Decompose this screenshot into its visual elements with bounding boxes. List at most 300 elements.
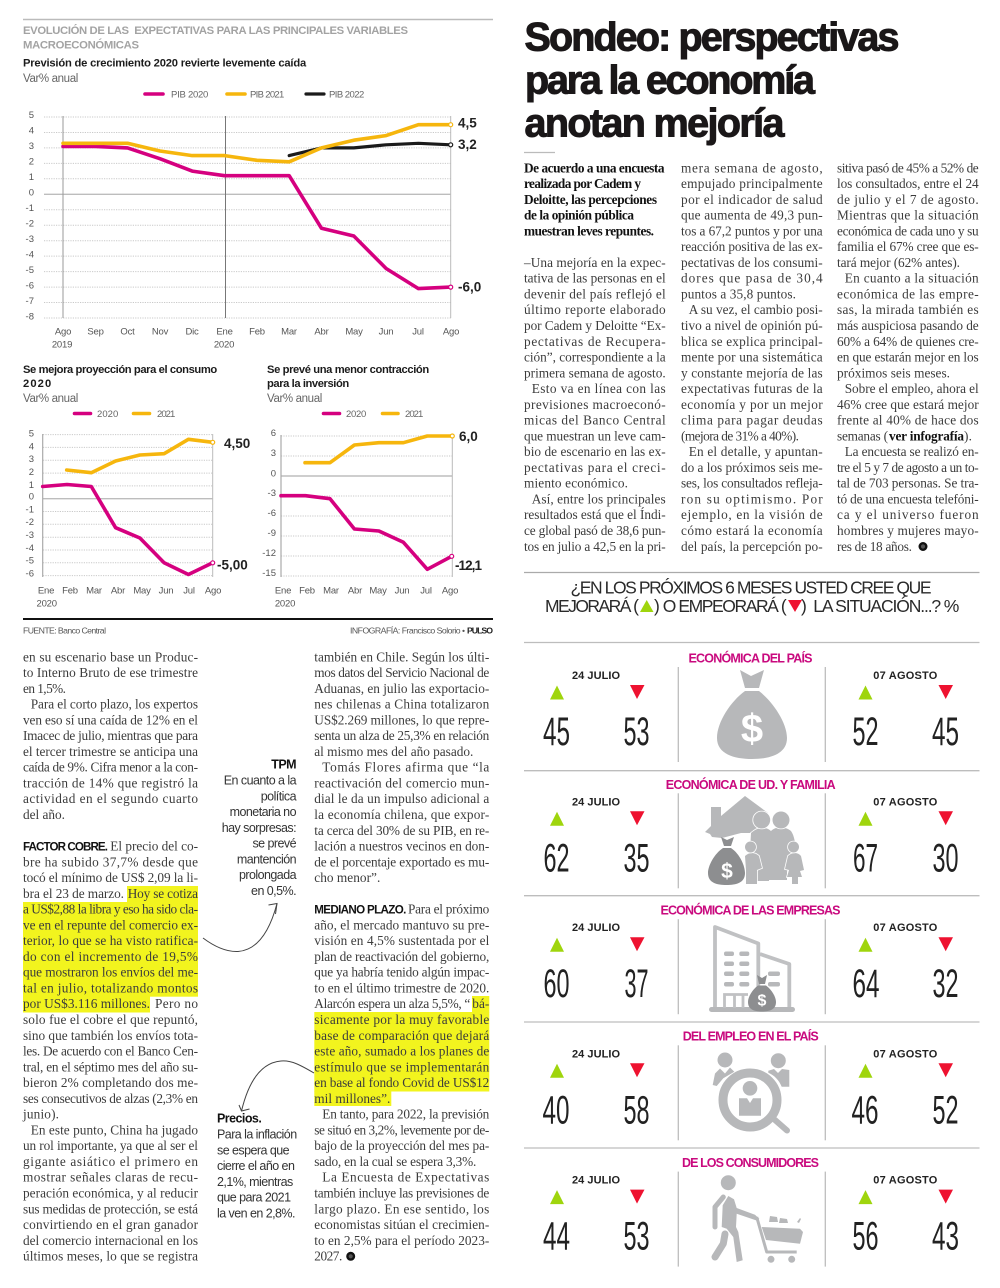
y axis labels: GDP: 0	[29, 188, 34, 198]
x axis labels: GDP: Sep	[87, 326, 104, 338]
x axis labels: GDP: 2019	[52, 340, 72, 350]
y axis labels: investment	[262, 428, 276, 579]
article lead: realizada por Cadem y	[524, 176, 641, 191]
article column 2: del país, la percepción po-	[681, 539, 823, 554]
value labels: investment	[455, 429, 482, 573]
article column: left: bre ha subido 37,7% desde que	[23, 854, 198, 869]
line: consumption 2021	[67, 439, 213, 473]
article column: left: últimos meses, lo que se registra	[23, 1249, 198, 1264]
article column: right of lower section: to en el último trimestre de 2020.	[314, 980, 489, 996]
infographic credit: PULSO	[467, 626, 493, 636]
y axis labels: GDP: -3	[26, 234, 34, 245]
article column 3: La encuesta se realizó en-	[845, 444, 979, 459]
legend: investment series: 2020	[346, 409, 366, 420]
article column 3: familia el 67% cree que es-	[837, 239, 979, 254]
survey question heading: )	[801, 596, 807, 616]
heading: macro expectations: MACROECONÓMICAS	[23, 38, 139, 52]
article column: left: Hoy se cotiza	[128, 886, 198, 901]
heading: macro expectations: EVOLUCIÓN DE LAS EXPECTATIVAS PARA LAS PRINCIPALES VARIABLES	[23, 24, 408, 37]
x axis labels: GDP: Jun	[379, 326, 393, 338]
article column 2: empujado principalmente	[681, 176, 823, 191]
article column: right of lower section: Tomás Flores afirma que “la	[322, 760, 489, 775]
article column 3: Mientras que la situación	[837, 208, 979, 223]
chart heading: consumption: Var% anual	[23, 393, 78, 405]
title	[524, 16, 900, 146]
value labels: GDP: -6,0	[458, 280, 481, 294]
row: economy of companies: ECONÓMICA DE LAS EMPRESAS	[660, 902, 840, 918]
chart heading: GDP: Previsión de crecimiento 2020 revierte levemente caída	[23, 58, 307, 70]
article column: right of lower section: año, el mercado mantuvo su pre-	[314, 917, 489, 932]
y axis labels: GDP: -1	[26, 203, 34, 214]
heading: macro expectations	[23, 24, 408, 52]
article column: left: Para el corto plazo, los expertos	[31, 697, 198, 712]
article column 2: ses, los consultados refleja-	[681, 476, 823, 491]
article column: left: sus medidas de protección, se está	[23, 1201, 198, 1216]
article column 1: resultados está que el Índi-	[524, 507, 666, 522]
row: consumers: 56	[852, 1215, 878, 1259]
x axis labels: GDP: Feb	[249, 326, 265, 338]
title: Sondeo: perspectivas	[524, 16, 900, 60]
side note: TPM: se prevé	[252, 836, 297, 850]
x axis labels: investment: Ene	[275, 586, 291, 596]
y axis labels: GDP: -8	[26, 312, 34, 322]
icon: family with house and bag: $	[721, 860, 733, 883]
y axis labels: GDP: -5	[26, 265, 34, 276]
article column 1: por Cadem y Deloitte “Ex-	[524, 318, 666, 333]
article column 1: tos en julio a 42,5 en la pri-	[524, 539, 666, 554]
article column 3: en que estarán mejor en los	[837, 350, 979, 364]
y axis labels: GDP: 3	[29, 141, 34, 152]
x axis labels: consumption: Abr	[111, 586, 125, 596]
arrow: quote highlight to prices note	[239, 1061, 314, 1111]
article column: left: del comercio internacional en los	[23, 1233, 198, 1248]
row: economy of companies: 37	[624, 962, 648, 1006]
article column 2: blica se explica principal-	[681, 334, 823, 349]
icon: office building with bag: $	[758, 992, 767, 1010]
article column: right of lower section: largo plazo. En ese sentido, los	[314, 1201, 489, 1216]
y axis labels: consumption	[26, 428, 34, 580]
title: anotan mejoría	[524, 102, 786, 146]
chart heading: consumption	[23, 364, 217, 405]
row: consumers: DE LOS CONSUMIDORES	[682, 1156, 819, 1170]
article column 2: pectativas de los consumi-	[681, 255, 823, 270]
side note: TPM: en 0,5%.	[251, 884, 296, 898]
legend: consumption series: 2020	[97, 409, 118, 420]
article column: right of lower section: 2027.	[314, 1249, 342, 1264]
article column 3: res de 18 años.	[837, 539, 912, 554]
article column 2	[681, 160, 823, 554]
article column 1: último reporte elaborado	[524, 302, 666, 317]
y axis labels: GDP	[26, 110, 34, 322]
row: economy of the country: 53	[624, 710, 650, 754]
x axis labels: GDP: Abr	[314, 326, 329, 338]
article column 3: 46% cree que estará mejor	[837, 397, 979, 412]
article column 3: tará mejor (62% antes).	[837, 255, 960, 270]
legend: GDP series: PIB 2020	[171, 90, 208, 100]
side note: TPM: prolongada	[239, 868, 297, 882]
row: consumers: 24 JULIO	[572, 1175, 620, 1187]
article column: right of lower section: senta un alza de 25,3% en relación	[314, 728, 490, 743]
y axis labels: consumption: -6	[26, 568, 34, 580]
y axis labels: consumption: -3	[26, 530, 34, 541]
x axis labels: consumption: 2020	[37, 598, 57, 610]
y axis labels: investment: -3	[268, 488, 276, 499]
article column: left: sino que también los envíos tota-	[23, 1028, 198, 1043]
line: PIB 2020	[63, 146, 451, 289]
value labels: GDP: 4,5	[458, 116, 477, 130]
y axis labels: consumption: -1	[26, 504, 34, 515]
article column 3: En cuanto a la situación	[845, 271, 979, 286]
x axis labels: GDP: Oct	[120, 326, 135, 338]
article column: left: en su escenario base un Produc-	[23, 649, 198, 664]
side note: prices: Precios.	[217, 1112, 261, 1126]
article column 1: Así, entre los principales	[532, 492, 666, 506]
article column 3: de julio y el 7 de agosto.	[837, 192, 979, 207]
chart: consumption forecast	[23, 364, 250, 610]
article column 2: tivo a nivel de opinión pú-	[681, 318, 823, 333]
x axis labels: GDP: May	[345, 326, 363, 338]
x axis labels: consumption	[37, 586, 221, 610]
row: economy of you and family: 30	[932, 836, 958, 880]
article column: right of lower section: dial le da un impulso adicional a	[314, 791, 489, 806]
y axis labels: investment: -12	[262, 548, 276, 559]
article column 1: Esto va en línea con las	[532, 381, 666, 396]
value labels: consumption	[217, 436, 250, 572]
x axis labels: investment	[275, 586, 458, 610]
article column: left: caída de 9%. Cifra menor a la con-	[23, 760, 198, 775]
x axis labels: investment: Jun	[395, 586, 409, 596]
article column: left: El precio del co-	[110, 838, 198, 854]
article column 1: que muestran un leve cam-	[524, 428, 666, 443]
row: consumers	[543, 1156, 959, 1267]
article column 2: dores que pasa de 30,4	[681, 271, 823, 286]
icon: money bag: $	[741, 707, 763, 751]
side note: TPM: En cuanto a la	[224, 774, 297, 788]
chart heading: investment: Se prevé una menor contracción	[267, 364, 429, 376]
line: investment 2020	[281, 496, 452, 569]
x axis labels: GDP: Nov	[152, 326, 169, 338]
row: economy of you and family: 07 AGOSTO	[873, 796, 938, 808]
survey question heading: )	[654, 596, 660, 616]
article column: left: bra el 23 de marzo.	[23, 886, 124, 901]
chart heading: consumption: 2020	[23, 378, 51, 390]
x axis labels: GDP: Ene	[216, 326, 233, 338]
article column 2: A su vez, el cambio posi-	[689, 302, 823, 317]
row: economy of companies: 07 AGOSTO	[873, 922, 938, 934]
article column 1: primera semana de agosto.	[524, 365, 666, 380]
article column: right of lower section: lación a nuestros vecinos en don-	[314, 838, 489, 854]
x axis labels: investment: Jul	[420, 586, 432, 596]
article column 2: clima para pagar deudas	[681, 413, 823, 428]
article column: right of lower section: al mismo mes del año pasado.	[314, 744, 473, 759]
row: economy of you and family: ECONÓMICA DE UD. Y FAMILIA	[666, 777, 836, 792]
row: economy of the country: ECONÓMICA DEL PAÍS	[688, 650, 812, 666]
article column 3: ).	[964, 428, 972, 443]
article column: right of lower section: reactivación del comercio mun-	[314, 776, 489, 790]
survey question heading: O EMPEORARÁ (	[663, 596, 787, 616]
article column: left: peración económica, y al reducir	[23, 1186, 199, 1200]
article column: right of lower section: también en Chile. Según los últi-	[314, 649, 489, 664]
article column 1: tativa de las personas en el	[524, 271, 666, 286]
article column 2: ejemplo, en la visión de	[681, 507, 823, 522]
article column 3: más auspiciosa pasando de	[837, 318, 979, 333]
article column: right of lower section	[314, 649, 490, 1264]
side note: TPM: TPM	[271, 758, 296, 772]
line: consumption 2020	[43, 484, 213, 574]
article column: right of lower section: Para el próximo	[408, 902, 490, 917]
y axis labels: consumption: 4	[29, 441, 34, 452]
article column: right of lower section: cho menor”.	[314, 870, 380, 885]
row: economy of the country: 45	[932, 710, 959, 754]
y axis labels: GDP: 4	[29, 126, 34, 136]
x axis labels: investment: Ago	[442, 586, 458, 596]
row: economy of you and family: 67	[853, 836, 878, 880]
article column 2: economía y por un mejor	[681, 397, 823, 412]
article column 3: sas, la mirada también es	[837, 302, 979, 317]
x axis labels: GDP: Jul	[412, 326, 424, 338]
y axis labels: GDP: -7	[26, 296, 34, 307]
legend: investment series	[324, 409, 423, 420]
article column: left: Imacec de julio, mientras que para	[23, 728, 198, 743]
side note: TPM	[222, 758, 297, 898]
icon: family with house and bag	[705, 796, 804, 885]
article column: right of lower section: en base al fondo Covid de US$12	[314, 1075, 489, 1090]
article column: right of lower section: la economía chilena, que expor-	[314, 807, 489, 822]
article lead	[524, 160, 665, 238]
y axis labels: investment: 0	[271, 468, 276, 480]
survey question heading	[545, 576, 959, 616]
y axis labels: consumption: 5	[29, 428, 34, 440]
article column 3: los consultados, entre el 24	[837, 176, 979, 191]
chart heading: investment: para la inversión	[267, 378, 349, 390]
row: economy of companies: 32	[932, 962, 958, 1006]
infographic credit: INFOGRAFÍA: Francisco Solorio •	[350, 626, 465, 636]
article column: left: del año.	[23, 807, 65, 822]
row: economy of the country: 07 AGOSTO	[873, 670, 938, 682]
y axis labels: consumption: -2	[26, 517, 34, 528]
article column: left: FACTOR COBRE.	[23, 840, 108, 854]
article column 1: pectativas de Recupera-	[524, 334, 666, 349]
article column: right of lower section: que ya habría tenido algún impac-	[314, 965, 489, 980]
article column: right of lower section: estímulo que se implementarán	[314, 1059, 490, 1074]
survey question heading: LA SITUACIÓN...? %	[813, 595, 959, 616]
x axis labels: consumption: Jul	[183, 586, 195, 596]
y axis labels: consumption: 1	[29, 480, 34, 491]
article column 3: próximos seis meses.	[837, 365, 950, 380]
legend: GDP series: PIB 2021	[250, 90, 284, 100]
article column: left: en 1,5%.	[23, 681, 66, 696]
article column 1: previsiones macroeconó-	[524, 397, 666, 412]
arrow: copper highlight to TPM note	[203, 904, 277, 952]
article column 1: micas del Banco Central	[524, 413, 666, 428]
article column 2: cómo estará la economía	[681, 523, 823, 538]
article column 2: En el detalle, y apuntan-	[689, 444, 823, 459]
article column 2: tos a 67,2 puntos y por una	[681, 223, 823, 238]
article column: left: el tercer trimestre se anticipa una	[23, 744, 198, 759]
article column: left: junio).	[22, 1107, 59, 1122]
row: economy of companies: 60	[544, 962, 570, 1006]
side note: TPM: monetaria no	[230, 805, 297, 819]
article column: right of lower section: US$2.269 millones, lo que repre-	[314, 712, 489, 727]
chart heading: investment: Var% anual	[267, 393, 322, 405]
row: economy of companies	[544, 902, 958, 1014]
x axis labels: consumption: Ene	[38, 586, 54, 596]
icon: magnifier over people	[713, 1052, 789, 1130]
row: economy of you and family	[544, 777, 958, 888]
line: PIB 2022	[289, 143, 451, 156]
article column 3: económica de las empre-	[837, 286, 979, 302]
article column 3: Sobre el empleo, ahora el	[845, 381, 979, 396]
article column: left: tocó el mínimo de US$ 2,09 la li-	[23, 870, 198, 885]
value labels: consumption: 4,50	[224, 436, 250, 451]
side note: prices: 2,1%, mientras	[217, 1175, 293, 1189]
article column: left: tracción de 14% que registró la	[23, 776, 198, 790]
value labels: GDP	[458, 116, 481, 294]
y axis labels: GDP: 1	[29, 172, 34, 183]
article column: right of lower section: bá-	[472, 996, 489, 1011]
row: economy of the country: 24 JULIO	[572, 670, 620, 682]
x axis labels: investment: Feb	[299, 586, 315, 596]
article column 1: –Una mejoría en la expec-	[523, 255, 666, 270]
side note: prices	[217, 1112, 297, 1220]
article column: right of lower section: Alarcón espera un alza 5,5%, “	[314, 996, 470, 1011]
value labels: investment: 6,0	[459, 429, 478, 444]
survey question heading: ¿EN LOS PRÓXIMOS 6 MESES USTED CREE QUE	[570, 576, 932, 598]
y axis labels: GDP: -2	[26, 218, 34, 230]
article column: right of lower section: MEDIANO PLAZO.	[314, 904, 406, 917]
article column: right of lower section: bajo de la proyección del mes pa-	[314, 1138, 489, 1153]
article column: right of lower section: mil millones”.	[314, 1091, 390, 1106]
row: economy of you and family: 24 JULIO	[572, 796, 620, 808]
article column 2: que aumenta de 49,3 pun-	[681, 208, 823, 223]
x axis labels: investment: May	[369, 586, 387, 596]
survey question heading: MEJORARÁ (	[545, 596, 639, 616]
row: consumers: 44	[543, 1215, 570, 1259]
y axis labels: GDP: 2	[29, 156, 34, 168]
article column: right of lower section: también incluye las previsiones de	[314, 1186, 489, 1200]
article column: left: que mostraron los envíos del me-	[23, 965, 198, 980]
panel: macroeconomic expectations charts	[23, 20, 493, 636]
legend: GDP series	[145, 90, 364, 100]
chart heading: GDP	[23, 58, 307, 85]
side note: TPM: hay sorpresas:	[222, 821, 296, 835]
x axis labels: GDP: Ago	[55, 326, 71, 338]
article column: left: terior, lo que se ha visto ratifica-	[23, 933, 198, 948]
article column: right of lower section: se situó en 3,2%, levemente por de-	[314, 1122, 489, 1137]
chart heading: consumption: Se mejora proyección para el consumo	[23, 364, 217, 376]
article column 2: mera semana de agosto,	[681, 160, 823, 175]
y axis labels: consumption: -5	[26, 556, 34, 567]
legend: consumption series: 2021	[157, 409, 175, 420]
icon: shopper with cart	[715, 1175, 803, 1263]
article column: left: ven eso sí una caída de 12% en el	[23, 712, 198, 727]
chart: investment forecast	[262, 364, 482, 610]
article column: left: bieron 2% completando dos me-	[23, 1075, 198, 1090]
article column 3: 60% a 64% de quienes cre-	[837, 334, 979, 349]
y axis labels: consumption: -4	[26, 543, 34, 554]
article column 3: tó de una encuesta telefóni-	[837, 492, 979, 506]
article column 3: económica de cada uno y su	[837, 223, 979, 238]
y axis labels: investment: 6	[271, 428, 276, 439]
article column 3	[837, 160, 979, 554]
article column 1: ce global pasó de 38,6 pun-	[524, 523, 666, 538]
legend: GDP series: PIB 2022	[329, 90, 364, 100]
article column: right of lower section: economistas sitúan el crecimien-	[314, 1217, 489, 1232]
article column 3: frente al 40% de hace dos	[837, 413, 979, 428]
article column: left: un rol importante, ya que al ser el	[23, 1138, 198, 1153]
row: employment: 46	[852, 1088, 878, 1132]
x axis labels: investment: Mar	[323, 586, 339, 596]
article column: left: En este punto, China ha jugado	[31, 1122, 198, 1137]
article column: right of lower section: este año, sumado a los planes de	[314, 1044, 489, 1059]
row: employment	[542, 1028, 958, 1140]
row: economy of the country: 52	[852, 710, 878, 754]
article column: left: ve en el repunte del comercio ex-	[23, 917, 198, 932]
row: economy of the country: 45	[543, 710, 570, 754]
article column 1: miento económico.	[524, 476, 628, 491]
x axis labels: consumption: Jun	[159, 586, 173, 596]
article column: left: to Interno Bruto de ese trimestre	[23, 665, 198, 680]
article column: left: mostrar señales claras de recu-	[23, 1170, 198, 1185]
article column: left: solo fue el cobre el que repuntó,	[23, 1012, 198, 1027]
article column: right of lower section: Aduanas, en julio las exportacio-	[314, 681, 489, 696]
y axis labels: investment: -9	[268, 528, 276, 539]
row: consumers: 53	[624, 1215, 650, 1259]
row: economy of companies: 24 JULIO	[572, 922, 620, 934]
row: economy of companies: 64	[852, 962, 880, 1006]
x axis labels: GDP	[52, 326, 459, 350]
article column: right of lower section: nes chilenas a China totalizaron	[314, 697, 490, 712]
article column 2: reacción positiva de las ex-	[681, 239, 823, 254]
article column 3: hombres y mujeres mayo-	[837, 523, 979, 538]
row: economy of you and family: 35	[624, 836, 650, 880]
side note: prices: se espera que	[217, 1143, 290, 1157]
article column: left: tal en julio, totalizando montos	[23, 980, 198, 996]
article column 1: bio de escenario en las ex-	[524, 444, 666, 459]
x axis labels: consumption: Mar	[86, 586, 102, 596]
article column: right of lower section: sicamente por la muy favorable	[314, 1012, 489, 1027]
article column: left: gigante asiático el primero en	[23, 1154, 198, 1169]
article column: left: ses consecutivos de alzas (2,3% en	[23, 1091, 198, 1106]
legend: investment series: 2021	[405, 409, 423, 420]
article column: right of lower section: mos datos del Servicio Nacional de	[314, 665, 489, 680]
y axis labels: investment: -15	[262, 568, 276, 579]
article column: right of lower section: to en 2,5% para el período 2023-	[314, 1233, 489, 1248]
chart: GDP forecast	[23, 58, 481, 350]
x axis labels: investment: 2020	[275, 598, 295, 610]
line: PIB 2021	[63, 125, 451, 162]
y axis labels: GDP: -4	[26, 250, 34, 260]
y axis labels: investment: 3	[271, 448, 276, 459]
article column 3: tal de 703 personas. Se tra-	[837, 476, 979, 491]
side note: prices: Para la inflación	[217, 1128, 297, 1142]
side note: TPM: mantención	[237, 852, 297, 866]
article column 2: por el indicador de salud	[681, 192, 823, 207]
value labels: consumption: -5,00	[217, 558, 248, 572]
article column 3: ver infografía	[889, 428, 964, 443]
article column: left: a US$2,88 la libra y eso ha sido cla-	[23, 902, 198, 917]
article column: left: convirtiendo en el gran ganador	[23, 1217, 199, 1232]
x axis labels: GDP: Mar	[281, 326, 297, 338]
row: employment: DEL EMPLEO EN EL PAÍS	[683, 1028, 819, 1044]
article column: right of lower section: visión en 4,5% sustentada por el	[314, 933, 490, 948]
chart heading: investment	[267, 364, 429, 405]
side note: prices: cierre el año en	[217, 1159, 295, 1173]
article column: right of lower section: En tanto, para 2022, la previsión	[322, 1107, 490, 1122]
article column 2: ron su optimismo. Por	[681, 492, 823, 506]
y axis labels: investment: -6	[268, 508, 276, 519]
article column: left	[22, 649, 199, 1264]
